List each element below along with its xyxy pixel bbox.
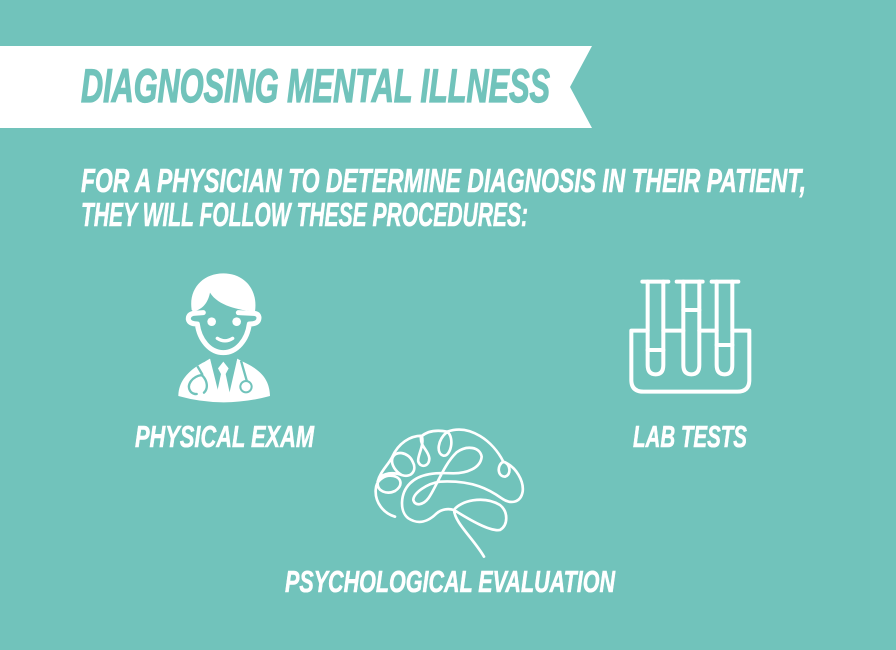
banner (0, 46, 592, 128)
label: psychological evaluation: PSYCHOLOGICAL EVALUATION (285, 564, 615, 599)
title: DIAGNOSING MENTAL ILLNESS (81, 59, 550, 112)
icon: test tubes (631, 282, 749, 392)
label: physical exam: PHYSICAL EXAM (135, 419, 315, 454)
icon: doctor (178, 273, 270, 402)
subtitle text: THEY WILL FOLLOW THESE PROCEDURES: (81, 196, 528, 233)
icon: brain (376, 430, 523, 557)
label: lab tests: LAB TESTS (633, 419, 747, 454)
subtitle text (81, 162, 806, 233)
